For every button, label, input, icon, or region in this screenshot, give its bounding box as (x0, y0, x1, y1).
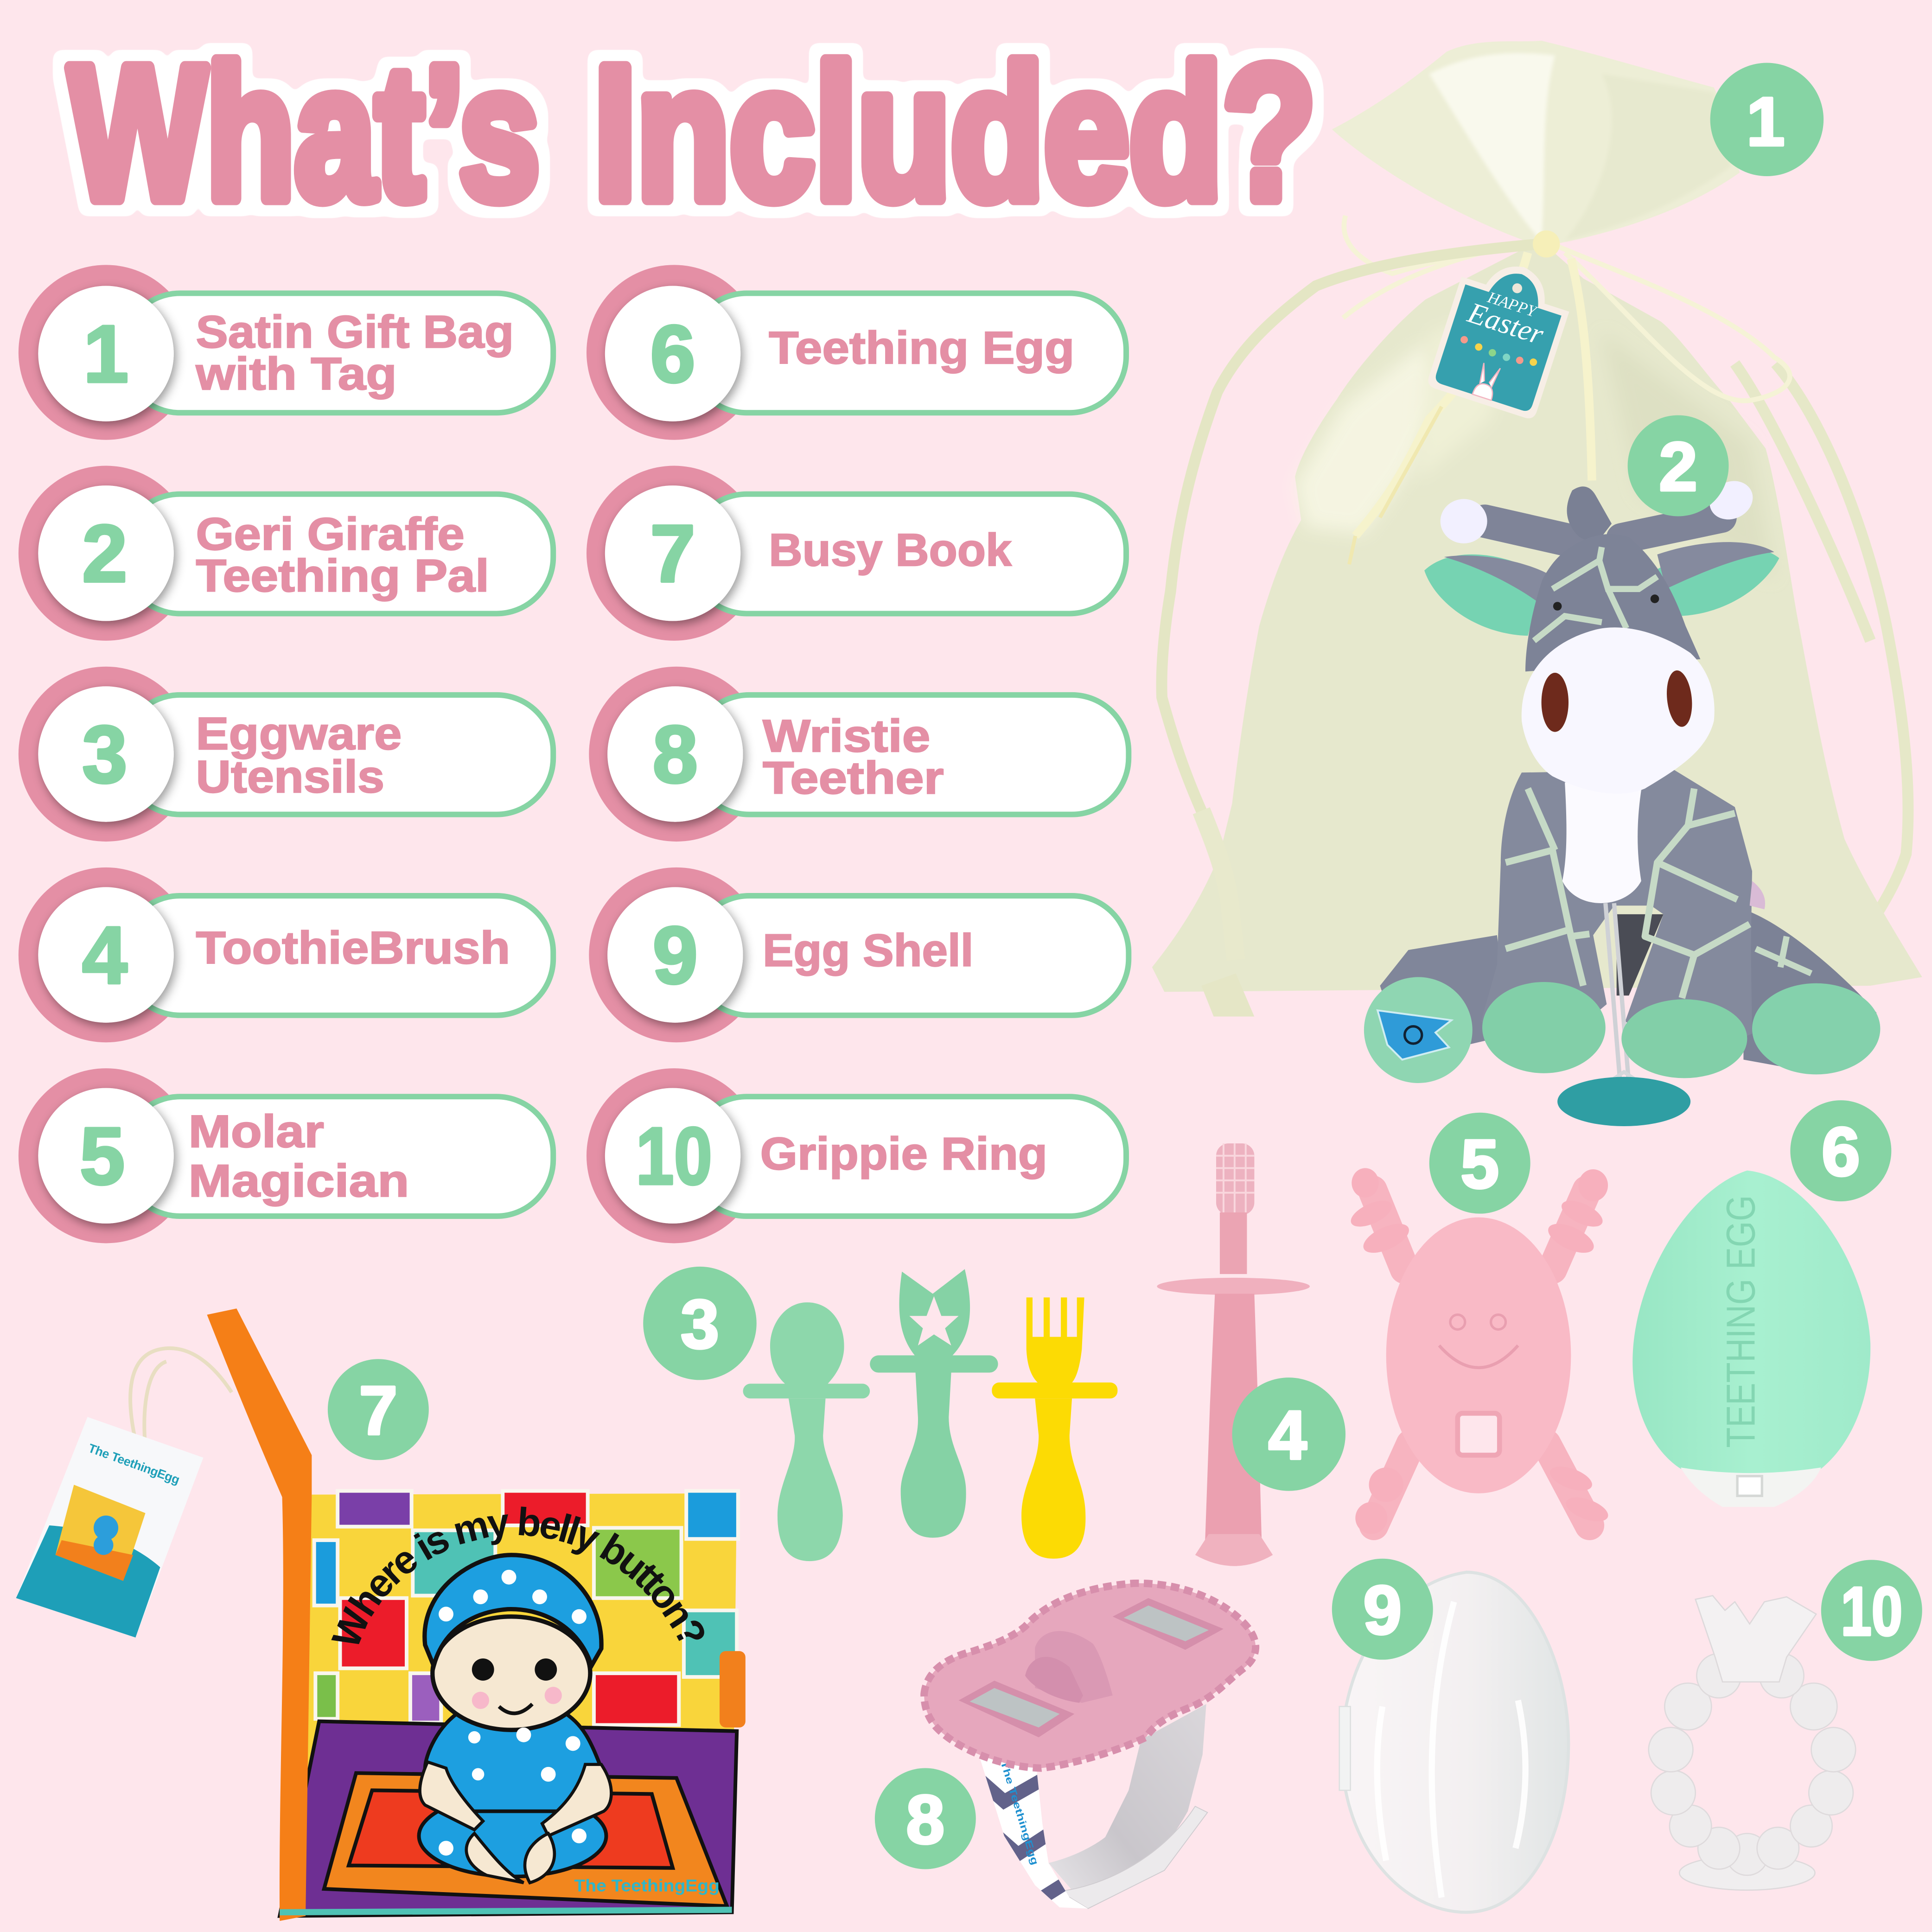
list item 2: Geri Giraffe Teething Pal (19, 466, 553, 641)
badge 6 (1790, 1100, 1891, 1201)
list item 4: ToothieBrush: 4 (82, 910, 128, 1001)
book cover title (357, 1535, 690, 1666)
egg shell (1339, 1572, 1569, 1912)
horns (1485, 521, 1577, 542)
list item 5: Molar Magician: 5 (80, 1111, 125, 1202)
side tab (720, 1651, 746, 1728)
checker wall (314, 1491, 738, 1725)
list item 3: Eggware Utensils: Eggware (196, 708, 402, 759)
list item 8: Wristie Teether (589, 667, 1129, 842)
satin gift bag (1152, 41, 1922, 1016)
busy book hang tag: The TeethingEgg (87, 1441, 182, 1487)
left ribbon (1162, 244, 1540, 960)
badge 3 (643, 1267, 757, 1380)
spine and strap (207, 1308, 312, 1921)
list item 6: Teething Egg: Teething Egg (769, 322, 1074, 373)
busy book: Where is my belly button? (324, 1500, 715, 1654)
eggware utensils (743, 1269, 1117, 1561)
title (69, 27, 1316, 239)
list item 7: Busy Book: Busy Book (769, 524, 1012, 575)
list item 6: Teething Egg: 6 (650, 309, 695, 400)
molar magician (1347, 1168, 1611, 1534)
list item 4: ToothieBrush (19, 867, 553, 1042)
rug (324, 1773, 727, 1906)
list item 6: Teething Egg (587, 265, 1126, 440)
toothie brush (1157, 1143, 1310, 1566)
feet (1364, 977, 1473, 1083)
badge 10 (1821, 1560, 1922, 1661)
busy book (207, 1308, 746, 1921)
badge 6: 6 (1822, 1113, 1860, 1190)
back legs (1380, 935, 1509, 1059)
list item 2: Geri Giraffe Teething Pal: 2 (82, 508, 128, 599)
list item 9: Egg Shell: Egg Shell (763, 925, 973, 976)
wristie teether (924, 1583, 1256, 1909)
list item 1: Satin Gift Bag with Tag: Satin Gift Bag (196, 306, 514, 357)
head (1525, 534, 1700, 671)
list item 3: Eggware Utensils (19, 667, 553, 842)
badge 1: 1 (1747, 83, 1785, 160)
badge 9: 9 (1363, 1571, 1402, 1649)
list item 7: Busy Book (587, 466, 1126, 641)
spoon (743, 1302, 870, 1561)
title: What’s (69, 27, 540, 239)
list item 5: Molar Magician (19, 1068, 553, 1243)
list item 10: Grippie Ring: 10 (636, 1111, 712, 1202)
cord (1606, 903, 1629, 1084)
badge 9 (1332, 1559, 1433, 1660)
neck bib (1562, 783, 1642, 903)
badge 4: 4 (1269, 1396, 1307, 1474)
list item 4: ToothieBrush: ToothieBrush (196, 922, 510, 973)
gift tag (1426, 249, 1578, 421)
badge 3: 3 (681, 1285, 719, 1363)
list item 7: Busy Book: 7 (650, 508, 695, 599)
logo: The TeethingEgg (574, 1875, 720, 1895)
list item 2: Geri Giraffe Teething Pal: Teething Pal (196, 550, 489, 601)
gift tag: HAPPY (1485, 288, 1540, 321)
list item 3: Eggware Utensils: 3 (82, 709, 128, 800)
list item 1: Satin Gift Bag with Tag: 1 (83, 309, 128, 400)
badge 7: 7 (359, 1371, 397, 1449)
list item 1: Satin Gift Bag with Tag: with Tag (195, 348, 397, 399)
list item 3: Eggware Utensils: Utensils (196, 751, 384, 802)
teething egg: TEETHING EGG (1718, 1195, 1763, 1448)
busy book hang tag (16, 1348, 232, 1638)
badge 5 (1429, 1113, 1530, 1214)
list item 10: Grippie Ring: Grippie Ring (760, 1128, 1047, 1179)
star fork (870, 1269, 998, 1538)
muzzle (1522, 627, 1715, 794)
baby (419, 1795, 606, 1876)
badge 7 (328, 1359, 429, 1460)
torso and front legs (1481, 770, 1752, 1059)
list item 10: Grippie Ring (587, 1068, 1126, 1243)
teal disc tag (1557, 1072, 1690, 1126)
badge 2 (1628, 415, 1729, 516)
back ribbon right (1735, 363, 1908, 973)
teething egg (1632, 1171, 1870, 1507)
ears (1424, 555, 1544, 636)
badge 10: 10 (1841, 1573, 1902, 1650)
list item 8: Wristie Teether: Wristie (763, 710, 930, 761)
badge 2: 2 (1659, 428, 1697, 505)
gift tag: Easter (1464, 296, 1548, 351)
yellow fork (992, 1297, 1117, 1559)
title: Included? (594, 27, 1316, 239)
badge 5: 5 (1460, 1125, 1499, 1203)
floor (280, 1722, 737, 1916)
list item 8: Wristie Teether: 8 (653, 709, 698, 800)
badge 4 (1232, 1377, 1345, 1491)
list item 5: Molar Magician: Magician (189, 1155, 409, 1206)
wristie teether: The TeethingEgg (998, 1760, 1040, 1866)
giraffe plush (1364, 474, 1880, 1126)
badge 1 (1710, 63, 1824, 176)
list item 8: Wristie Teether: Teether (763, 752, 944, 803)
badge 8: 8 (906, 1781, 944, 1858)
badge 8 (875, 1768, 976, 1869)
list item 1: Satin Gift Bag with Tag (19, 265, 553, 440)
grippie ring (1649, 1595, 1855, 1890)
list item 9: Egg Shell (589, 867, 1129, 1042)
list item 2: Geri Giraffe Teething Pal: Geri Giraffe (196, 508, 465, 559)
list item 9: Egg Shell: 9 (653, 910, 698, 1001)
list item 5: Molar Magician: Molar (189, 1106, 324, 1157)
